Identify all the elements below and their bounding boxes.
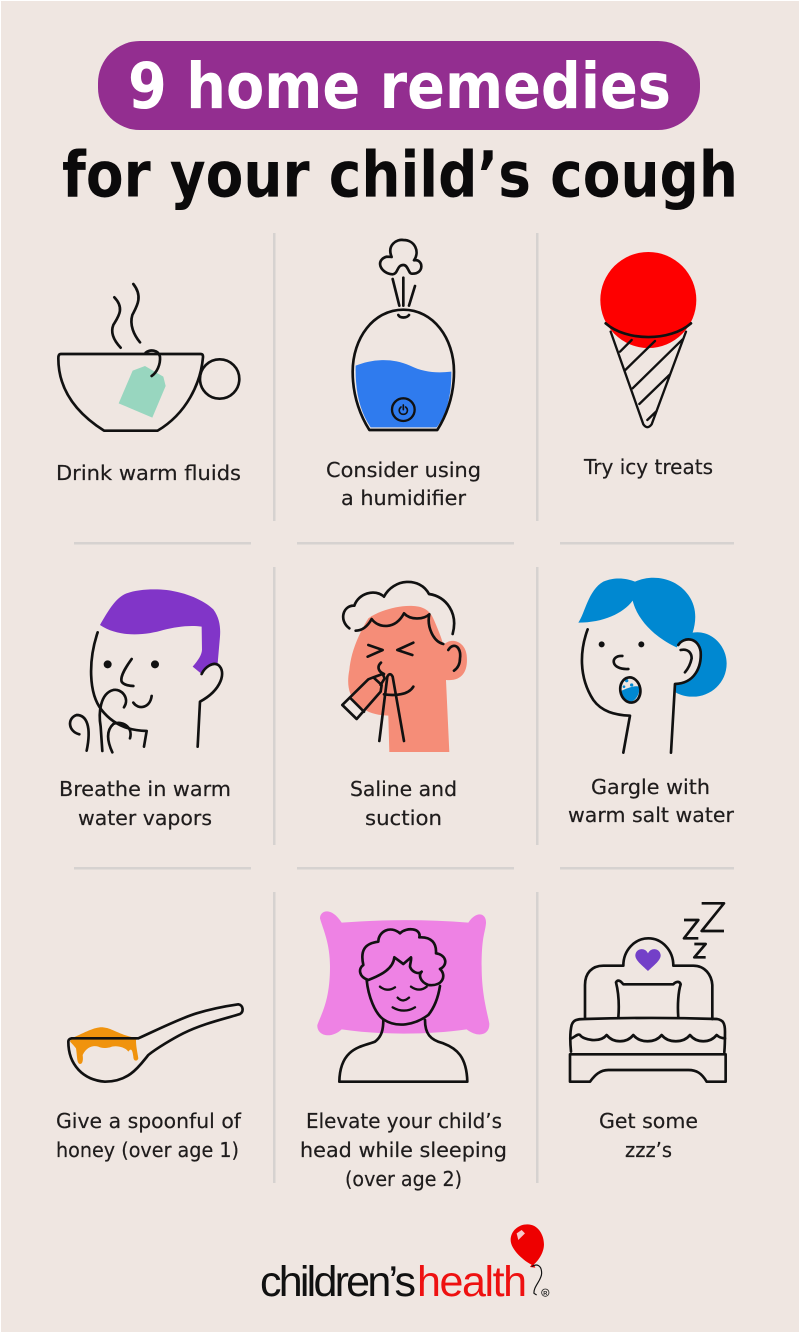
label: Give a spoonful of [56, 1109, 242, 1133]
icon: spoon of honey [68, 1004, 243, 1082]
label [59, 777, 231, 830]
icon: ice cream cone [600, 252, 696, 427]
logo wordmark [260, 1258, 527, 1306]
label: suction [365, 806, 442, 830]
label [326, 458, 481, 510]
panel: warm water vapors [59, 589, 231, 830]
icon: red balloon: R [543, 1291, 547, 1297]
icon: child using nasal spray [342, 582, 467, 752]
panel: sleep [570, 903, 726, 1162]
logo wordmark: health [417, 1258, 527, 1306]
icon: teacup [58, 284, 239, 431]
icon: humidifier [353, 240, 454, 430]
title pill: 9 home remedies [128, 50, 671, 123]
label: Try icy treats [583, 455, 713, 479]
label: warm salt water [568, 803, 735, 827]
label [568, 775, 735, 827]
label: water vapors [78, 806, 212, 830]
logo [260, 1224, 549, 1306]
panel: elevate head [300, 911, 507, 1191]
label: Drink warm fluids [56, 461, 241, 485]
label [300, 1109, 507, 1191]
label: head while sleeping [300, 1138, 507, 1162]
icon: red balloon [511, 1224, 549, 1297]
panel: gargle [568, 578, 735, 827]
panel: humidifier [326, 240, 481, 510]
icon: child gargling [578, 578, 727, 753]
label [350, 777, 457, 830]
panel: icy treats [583, 252, 713, 479]
label: (over age 2) [345, 1167, 462, 1191]
label [56, 1109, 242, 1162]
panel: saline and suction [342, 582, 467, 830]
icon: boy breathing vapors [70, 589, 222, 752]
label: zzz’s [625, 1138, 672, 1162]
label: Breathe in warm [59, 777, 231, 801]
label: Gargle with [591, 775, 710, 799]
panel: drink warm fluids [56, 284, 241, 485]
label: Consider using [326, 458, 481, 482]
title [62, 41, 738, 212]
icon: bed with heart [570, 903, 726, 1082]
label [599, 1109, 698, 1162]
logo wordmark: children’s [260, 1258, 416, 1306]
icon: child on pillow [317, 911, 489, 1082]
label: Get some [599, 1109, 698, 1133]
label: Elevate your child’s [306, 1109, 502, 1133]
label: honey (over age 1) [56, 1138, 239, 1162]
panel: honey [56, 1004, 243, 1162]
label: Saline and [350, 777, 457, 801]
label: a humidifier [341, 486, 467, 510]
